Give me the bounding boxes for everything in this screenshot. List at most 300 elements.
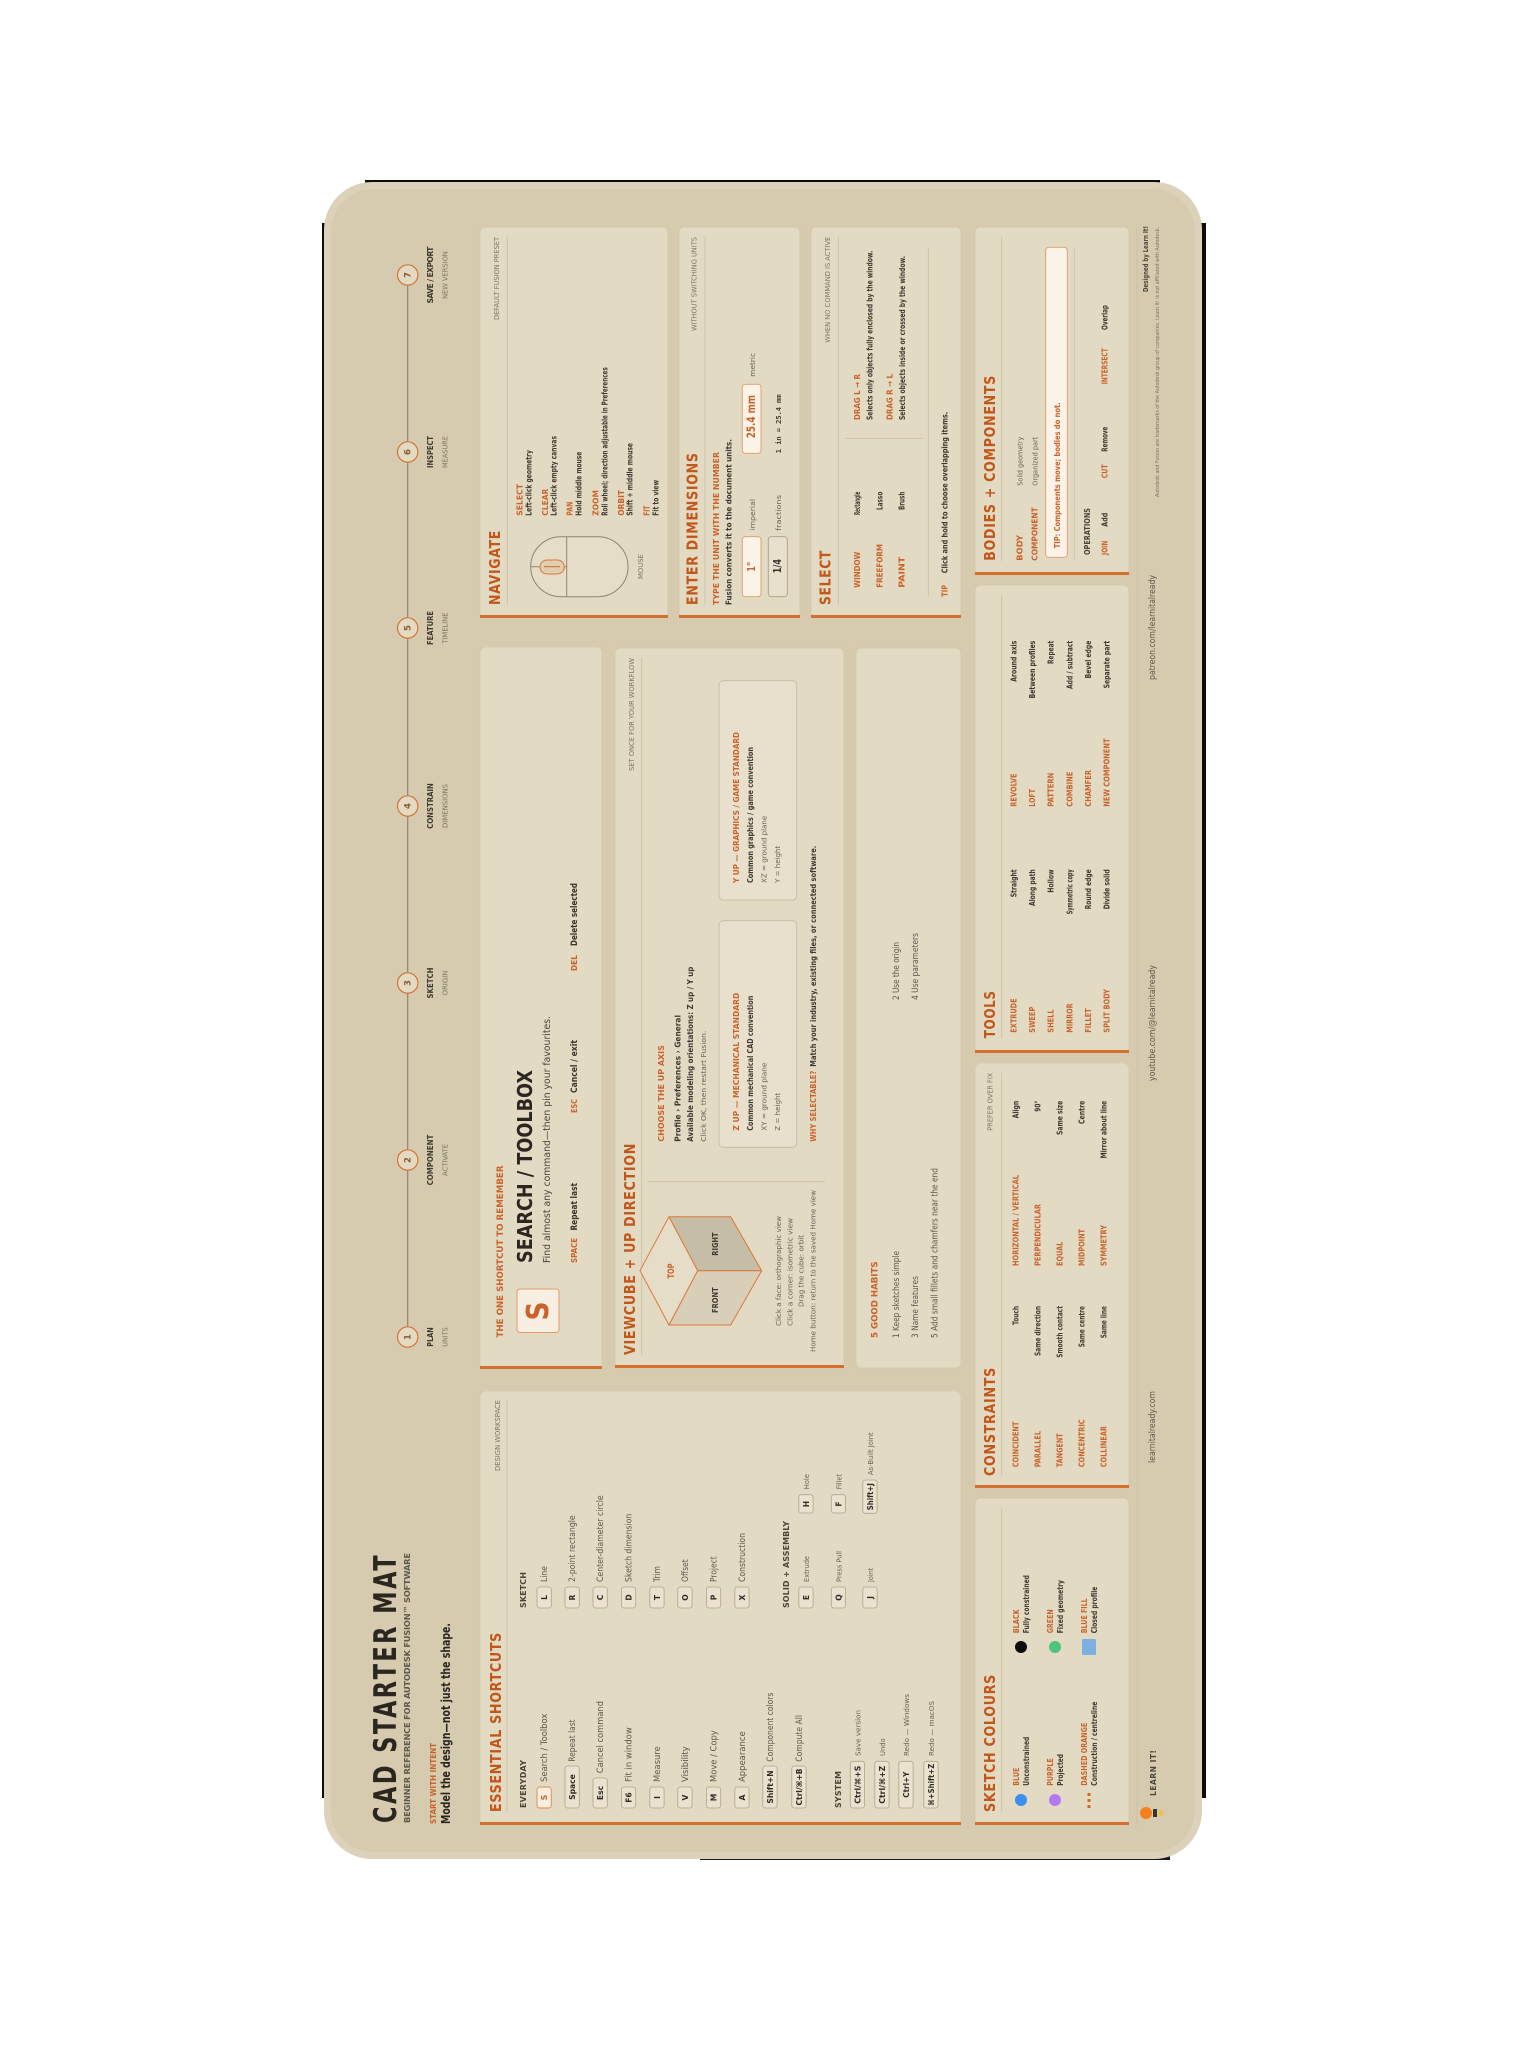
heading: ESSENTIAL SHORTCUTS: [487, 1632, 505, 1812]
step 1: UNITS: [441, 1327, 450, 1347]
card: Y up: [719, 681, 797, 900]
panel note: DEFAULT FUSION PRESET: [492, 237, 501, 320]
everyday shortcuts: Cancel command: [596, 1701, 606, 1773]
tools table: Along path: [1028, 869, 1037, 906]
system shortcuts: Ctrl/⌘+S: [854, 1766, 862, 1804]
step 3: [398, 968, 450, 998]
heading: NAVIGATE: [486, 530, 504, 605]
constraints table: Same line: [1100, 1306, 1109, 1338]
heading: ENTER DIMENSIONS: [683, 452, 701, 605]
viewcube captions: Drag the cube: orbit: [797, 1235, 806, 1307]
operations: Overlap: [1100, 305, 1109, 330]
card: Z up: [719, 921, 797, 1147]
drag directions: DRAG L → R: [853, 374, 862, 420]
solid and assembly shortcuts: E: [802, 1595, 811, 1600]
navigation list: PAN: [566, 502, 575, 516]
instruction: TYPE THE UNIT WITH THE NUMBER: [712, 452, 721, 605]
everyday shortcuts: Space: [568, 1774, 577, 1800]
drag directions: Selects only objects fully enclosed by the window.: [866, 251, 875, 420]
definitions: COMPONENT: [1031, 507, 1040, 561]
solid and assembly shortcuts: As-Built Joint: [866, 1432, 875, 1475]
everyday shortcuts: Appearance: [738, 1731, 748, 1782]
step 4: [398, 783, 450, 829]
tools table: Divide solid: [1102, 869, 1111, 909]
constraints table: Same direction: [1034, 1306, 1043, 1356]
everyday shortcuts: Esc: [596, 1786, 605, 1800]
tools table: Separate part: [1102, 640, 1111, 688]
tools table: Bevel edge: [1084, 641, 1093, 678]
panel: essential shortcuts: [480, 1391, 961, 1825]
step 1: [398, 1327, 450, 1347]
everyday shortcuts: F6: [624, 1792, 634, 1803]
solid and assembly shortcuts: Fillet: [834, 1474, 844, 1489]
sketch shortcuts: O: [681, 1594, 690, 1601]
step 5: TIMELINE: [441, 612, 450, 644]
tools table: SPLIT BODY: [1102, 989, 1111, 1033]
dashed orange: DASHED ORANGE: [1080, 1723, 1089, 1786]
big S key: S: [521, 1302, 556, 1320]
operations: INTERSECT: [1100, 348, 1109, 384]
tip callout: [1046, 247, 1067, 557]
step 5: FEATURE: [426, 611, 435, 645]
viewcube captions: Click a face: orthographic view: [774, 1216, 783, 1326]
constraints table: Smooth contact: [1055, 1306, 1064, 1358]
title block: [368, 1553, 453, 1824]
brand name: LEARN IT!: [1149, 1750, 1158, 1796]
sketch shortcuts: T: [653, 1594, 662, 1600]
panel note: WITHOUT SWITCHING UNITS: [690, 237, 699, 331]
solid and assembly shortcuts: Shift+J: [866, 1483, 875, 1510]
tools table: MIRROR: [1065, 1003, 1074, 1033]
blue: Unconstrained: [1022, 1737, 1031, 1786]
black: BLACK: [1012, 1609, 1021, 1633]
kicker: THE ONE SHORTCUT TO REMEMBER: [496, 1165, 506, 1338]
step 3: ORIGIN: [441, 970, 450, 996]
navigation list: Shift + middle mouse: [626, 443, 635, 516]
constraints table: CONCENTRIC: [1077, 1419, 1086, 1467]
solid and assembly shortcuts: Press Pull: [834, 1551, 844, 1582]
why selectable note: Match your industry, existing files, or connected software.: [809, 846, 818, 1067]
step 7: [398, 246, 450, 304]
solid and assembly shortcuts: SOLID + ASSEMBLY: [782, 1521, 791, 1608]
tools table: COMBINE: [1065, 772, 1074, 807]
panel: sketch colours: [975, 1498, 1129, 1825]
operations: OPERATIONS: [1083, 508, 1092, 555]
panel note: DESIGN WORKSPACE: [493, 1400, 502, 1471]
dashed orange: [1080, 1702, 1099, 1808]
constraints table: PERPENDICULAR: [1034, 1204, 1043, 1266]
fractions input: 1/4: [771, 559, 784, 573]
everyday shortcuts: Compute All: [795, 1715, 805, 1762]
panel: 5 good habits: 1 Keep sketches simple: [892, 1251, 902, 1338]
card: Z up: Common mechanical CAD convention: [746, 996, 755, 1131]
constraints table: Same size: [1055, 1101, 1064, 1135]
imperial input: imperial: [748, 499, 757, 531]
everyday shortcuts: EVERYDAY: [519, 1760, 528, 1808]
everyday shortcuts: M: [710, 1794, 718, 1801]
heading: VIEWCUBE + UP DIRECTION: [621, 1143, 639, 1355]
step 4: 4: [404, 803, 414, 809]
green: GREEN: [1046, 1609, 1055, 1633]
icon: viewcube: FRONT: [711, 1287, 720, 1313]
instruction: [712, 439, 734, 605]
selection modes: FREEFORM: [875, 544, 884, 588]
constraints table: Same centre: [1077, 1306, 1086, 1347]
constraints table: [1011, 1101, 1109, 1467]
icon: viewcube: [640, 1217, 762, 1325]
choose the up axis: Profile › Preferences › General: [674, 1015, 683, 1142]
heading: CONSTRAINTS: [981, 1367, 999, 1476]
solid and assembly shortcuts: [782, 1432, 877, 1608]
step 3: SKETCH: [426, 968, 435, 998]
operations: CUT: [1100, 464, 1109, 478]
constraints table: TANGENT: [1055, 1433, 1064, 1467]
constraints table: SYMMETRY: [1100, 1225, 1109, 1266]
purple: [1046, 1754, 1065, 1806]
panel: tools: [975, 585, 1129, 1053]
selection modes: WINDOW: [853, 552, 862, 588]
conversion note: 1 in = 25.4 mm: [774, 394, 783, 453]
sketch shortcuts: SKETCH: [519, 1572, 528, 1608]
card: Z up: Z = height: [773, 1093, 782, 1131]
step 6: [398, 435, 450, 468]
panel: 5 good habits: 5 GOOD HABITS: [871, 1261, 881, 1338]
tip callout: TIP: Components move; bodies do not.: [1053, 402, 1062, 548]
solid and assembly shortcuts: Joint: [866, 1568, 875, 1583]
sketch shortcuts: Construction: [738, 1533, 748, 1582]
step 2: [398, 1134, 450, 1185]
step 1: PLAN: [426, 1327, 435, 1347]
heading: TOOLS: [981, 990, 999, 1038]
tools table: PATTERN: [1046, 773, 1055, 807]
repeat row: SPACE: [570, 1238, 579, 1263]
everyday shortcuts: Search / Toolbox: [540, 1714, 550, 1782]
tools table: REVOLVE: [1010, 773, 1019, 807]
operations: JOIN: [1100, 541, 1109, 556]
navigation list: Roll wheel; direction adjustable in Preferences: [600, 367, 609, 516]
definitions: Solid geometry: [1016, 436, 1025, 486]
blue: BLUE: [1012, 1768, 1021, 1786]
panel: 5 good habits: 2 Use the origin: [892, 942, 902, 1000]
sketch shortcuts: Sketch dimension: [624, 1514, 634, 1582]
everyday shortcuts: Repeat last: [568, 1719, 578, 1762]
fractions input: [768, 495, 787, 597]
navigation list: ORBIT: [617, 489, 626, 516]
solid and assembly shortcuts: H: [802, 1501, 811, 1507]
definitions: [1016, 436, 1040, 561]
icon: learn it logo: [1140, 1807, 1164, 1819]
heading: BODIES + COMPONENTS: [981, 375, 999, 561]
system shortcuts: Redo — Windows: [902, 1694, 911, 1756]
solid and assembly shortcuts: J: [866, 1596, 875, 1600]
footer: [1137, 226, 1164, 1825]
navigation list: Fit to view: [651, 480, 660, 516]
constraints table: Touch: [1011, 1306, 1020, 1325]
icon: mouse: MOUSE: [636, 554, 645, 579]
delete row: Delete selected: [570, 883, 580, 946]
tools table: LOFT: [1028, 789, 1037, 807]
sketch shortcuts: Project: [710, 1556, 720, 1582]
desk mat base: [324, 182, 1202, 1859]
sketch shortcuts: Trim: [653, 1566, 663, 1583]
panel: 5 good habits: 4 Use parameters: [911, 933, 921, 1000]
icon: viewcube: TOP: [667, 1264, 677, 1278]
tagline: Model the design—not just the shape.: [438, 1623, 453, 1824]
system shortcuts: Ctrl/⌘+Z: [878, 1765, 887, 1804]
everyday shortcuts: Ctrl/⌘+B: [795, 1768, 804, 1806]
fractions input: fractions: [774, 495, 783, 531]
purple: PURPLE: [1046, 1758, 1055, 1786]
sketch shortcuts: Line: [540, 1566, 550, 1582]
navigation list: Left-click empty canvas: [550, 436, 559, 516]
system shortcuts: Undo: [878, 1738, 887, 1756]
operations: Add: [1100, 513, 1109, 527]
metric input: metric: [748, 353, 757, 377]
sketch shortcuts: C: [596, 1594, 605, 1600]
everyday shortcuts: S: [540, 1794, 549, 1800]
navigation list: [516, 367, 660, 516]
definitions: Organized part: [1031, 437, 1040, 486]
choose the up axis: [657, 966, 708, 1142]
step 4: CONSTRAIN: [426, 783, 435, 829]
card: Y up: Y = height: [773, 846, 782, 884]
heading: SEARCH / TOOLBOX: [513, 1069, 537, 1263]
constraints table: COINCIDENT: [1011, 1421, 1020, 1467]
panel: constraints: [975, 1063, 1129, 1488]
card: Z up: Z UP — MECHANICAL STANDARD: [732, 992, 741, 1131]
panel: navigate: [480, 227, 668, 618]
sketch shortcuts: D: [624, 1594, 634, 1601]
sketch shortcuts: X: [738, 1594, 747, 1600]
sketch shortcuts: Center-diameter circle: [596, 1495, 606, 1582]
selection modes: PAINT: [897, 556, 906, 588]
system shortcuts: ⌘+Shift+Z: [927, 1763, 936, 1806]
operations: Remove: [1100, 427, 1109, 452]
step 4: DIMENSIONS: [441, 784, 450, 828]
step 7: NEW VERSION: [441, 251, 450, 299]
selection modes: Rectangle: [853, 492, 862, 515]
panel: 5 good habits: 3 Name features: [911, 1276, 921, 1338]
step 3: 3: [404, 980, 414, 986]
youtube link: youtube.com/@learnitalready: [1148, 965, 1158, 1081]
step 7: 7: [404, 272, 414, 278]
navigation list: SELECT: [516, 483, 525, 516]
everyday shortcuts: Move / Copy: [710, 1730, 720, 1782]
sketch shortcuts: R: [568, 1594, 577, 1600]
tools table: [1010, 640, 1111, 1033]
tools table: Repeat: [1046, 640, 1055, 664]
sketch shortcuts: L: [540, 1595, 549, 1600]
tools table: Symmetric copy: [1065, 869, 1074, 914]
step 6: MEASURE: [441, 436, 450, 468]
kicker: START WITH INTENT: [429, 1743, 438, 1824]
tools table: NEW COMPONENT: [1102, 738, 1111, 807]
navigation list: CLEAR: [541, 489, 550, 516]
everyday shortcuts: Visibility: [681, 1746, 691, 1782]
card: Z up: XY = ground plane: [760, 1062, 769, 1131]
tools table: Hollow: [1046, 869, 1055, 893]
viewcube captions: Home button: return to the saved Home view: [809, 1190, 818, 1352]
sketch shortcuts: Offset: [681, 1559, 691, 1582]
step 1: 1: [404, 1334, 414, 1340]
tools table: CHAMFER: [1084, 770, 1093, 807]
blue fill: [1080, 1587, 1099, 1655]
dashed orange: Construction / centreline: [1090, 1702, 1099, 1786]
constraints table: MIDPOINT: [1077, 1229, 1086, 1266]
constraints table: Mirror about line: [1100, 1101, 1109, 1158]
everyday shortcuts: V: [681, 1794, 690, 1800]
blue fill: Closed profile: [1090, 1587, 1099, 1633]
delete row: [570, 883, 580, 971]
tools table: SWEEP: [1028, 1007, 1037, 1033]
constraints table: Centre: [1077, 1101, 1086, 1124]
panel: enter dimensions: [679, 227, 800, 618]
heading: SKETCH COLOURS: [981, 1674, 999, 1812]
step 6: INSPECT: [426, 435, 435, 468]
tools table: Add / subtract: [1065, 640, 1074, 689]
solid and assembly shortcuts: F: [834, 1501, 844, 1507]
step 2: ACTIVATE: [441, 1144, 450, 1176]
purple: Projected: [1056, 1754, 1065, 1786]
green: Fixed geometry: [1056, 1580, 1065, 1633]
definitions: BODY: [1016, 535, 1025, 561]
delete row: DEL: [570, 955, 579, 971]
viewcube captions: Click a corner: isometric view: [786, 1218, 795, 1326]
step 6: 6: [404, 449, 414, 455]
everyday shortcuts: I: [653, 1796, 662, 1799]
system shortcuts: Ctrl+Y: [902, 1771, 911, 1798]
panel: bodies and components: [975, 227, 1129, 575]
constraints table: PARALLEL: [1034, 1431, 1043, 1467]
panel note: WHEN NO COMMAND IS ACTIVE: [823, 236, 832, 343]
step 5: 5: [404, 625, 414, 631]
tip: Click and hold to choose overlapping items.: [940, 412, 949, 573]
heading: SELECT: [817, 550, 835, 605]
why selectable note: [809, 846, 818, 1142]
everyday shortcuts: Component colors: [766, 1692, 776, 1762]
constraints table: 90°: [1034, 1101, 1043, 1112]
credit: Designed by Learn It!: [1142, 226, 1150, 292]
tools table: SHELL: [1046, 1009, 1055, 1033]
drag directions: DRAG R → L: [885, 374, 894, 420]
panel note: SET ONCE FOR YOUR WORKFLOW: [627, 657, 636, 771]
step 2: 2: [404, 1157, 414, 1163]
panel: 5 good habits: 5 Add small fillets and chamfers near the end: [931, 1168, 941, 1338]
icon: viewcube: RIGHT: [711, 1232, 720, 1256]
sketch shortcuts: 2-point rectangle: [568, 1515, 578, 1582]
patreon link: patreon.com/learnitalready: [1148, 575, 1158, 680]
black: [1012, 1575, 1031, 1653]
panel: select: [811, 227, 961, 618]
selection modes: Brush: [897, 492, 906, 510]
system shortcuts: Redo — macOS: [927, 1701, 936, 1756]
constraints table: COLLINEAR: [1100, 1426, 1109, 1467]
navigation list: ZOOM: [591, 490, 600, 516]
title: CAD STARTER MAT: [368, 1553, 404, 1823]
escape row: ESC: [570, 1099, 579, 1113]
system shortcuts: SYSTEM: [834, 1771, 843, 1808]
sketch shortcuts: [519, 1495, 749, 1608]
escape row: [570, 1040, 580, 1113]
tip: TIP: [940, 585, 949, 597]
selection modes: [853, 492, 906, 588]
tools table: Between profiles: [1028, 640, 1037, 698]
everyday shortcuts: Measure: [653, 1746, 663, 1782]
system shortcuts: Save version: [854, 1710, 862, 1756]
black: Fully constrained: [1022, 1575, 1031, 1633]
solid and assembly shortcuts: Hole: [802, 1473, 811, 1489]
blue fill: BLUE FILL: [1080, 1598, 1089, 1633]
imperial input: 1": [745, 562, 758, 572]
metric input: [742, 353, 761, 453]
icon: mouse: [531, 537, 645, 597]
choose the up axis: Click OK, then restart Fusion.: [699, 1031, 708, 1142]
system shortcuts: [834, 1694, 938, 1808]
constraints table: Align: [1011, 1101, 1020, 1118]
everyday shortcuts: [519, 1692, 806, 1808]
panel: viewcube and up direction: [615, 648, 844, 1368]
why selectable note: WHY SELECTABLE?: [809, 1070, 818, 1142]
everyday shortcuts: Fit in window: [624, 1727, 634, 1782]
tools table: EXTRUDE: [1010, 998, 1019, 1033]
metric input: 25.4 mm: [744, 395, 758, 438]
step 7: SAVE / EXPORT: [426, 246, 435, 304]
everyday shortcuts: Shift+N: [766, 1770, 775, 1804]
repeat row: Repeat last: [570, 1183, 580, 1230]
solid and assembly shortcuts: Extrude: [802, 1555, 811, 1582]
workflow timeline: [398, 246, 450, 1347]
selection modes: Lasso: [875, 492, 884, 510]
green: [1046, 1580, 1065, 1653]
description: Find almost any command—then pin your favourites.: [542, 1016, 553, 1263]
panel: 5 good habits: [856, 648, 961, 1368]
blue: [1012, 1737, 1031, 1806]
legal note: Autodesk and Fusion are trademarks of the Autodesk group of companies. Learn It! is not affiliated with Autodesk.: [1155, 227, 1161, 497]
card: Y up: XZ = ground plane: [760, 815, 769, 883]
imperial input: [742, 499, 761, 597]
choose the up axis: CHOOSE THE UP AXIS: [657, 1045, 666, 1142]
navigation list: Hold middle mouse: [575, 452, 584, 516]
tools table: Straight: [1010, 869, 1019, 897]
drag directions: Selects objects inside or crossed by the window.: [898, 256, 907, 420]
repeat row: [570, 1183, 580, 1263]
constraints table: HORIZONTAL / VERTICAL: [1011, 1175, 1020, 1266]
choose the up axis: Available modeling orientations: Z up / Y up: [686, 966, 695, 1142]
big S key: [517, 1289, 559, 1332]
step 2: COMPONENT: [426, 1134, 435, 1185]
operations: [1083, 305, 1109, 556]
viewcube captions: [774, 1190, 818, 1352]
tools table: Around axis: [1010, 640, 1019, 682]
panel: search toolbox: [480, 647, 602, 1369]
navigation list: FIT: [642, 505, 651, 516]
panel note: PREFER OVER FIX: [986, 1073, 995, 1131]
card: Y up: Y UP — GRAPHICS / GAME STANDARD: [732, 732, 741, 884]
drag directions: [853, 251, 907, 420]
website link: learnitalready.com: [1148, 1391, 1158, 1463]
instruction: Fusion converts it to the document units.: [725, 439, 734, 605]
escape row: Cancel / exit: [570, 1040, 580, 1093]
solid and assembly shortcuts: Q: [834, 1594, 844, 1601]
sketch shortcuts: P: [710, 1594, 718, 1600]
card: Y up: Common graphics / game convention: [746, 747, 755, 883]
subtitle: BEGINNER REFERENCE FOR AUTODESK FUSION™ SOFTWARE: [402, 1553, 412, 1823]
tools table: FILLET: [1084, 1008, 1093, 1033]
everyday shortcuts: A: [738, 1794, 747, 1800]
step 5: [398, 611, 450, 645]
tools table: Round edge: [1084, 869, 1093, 909]
navigation list: Left-click geometry: [525, 450, 534, 516]
